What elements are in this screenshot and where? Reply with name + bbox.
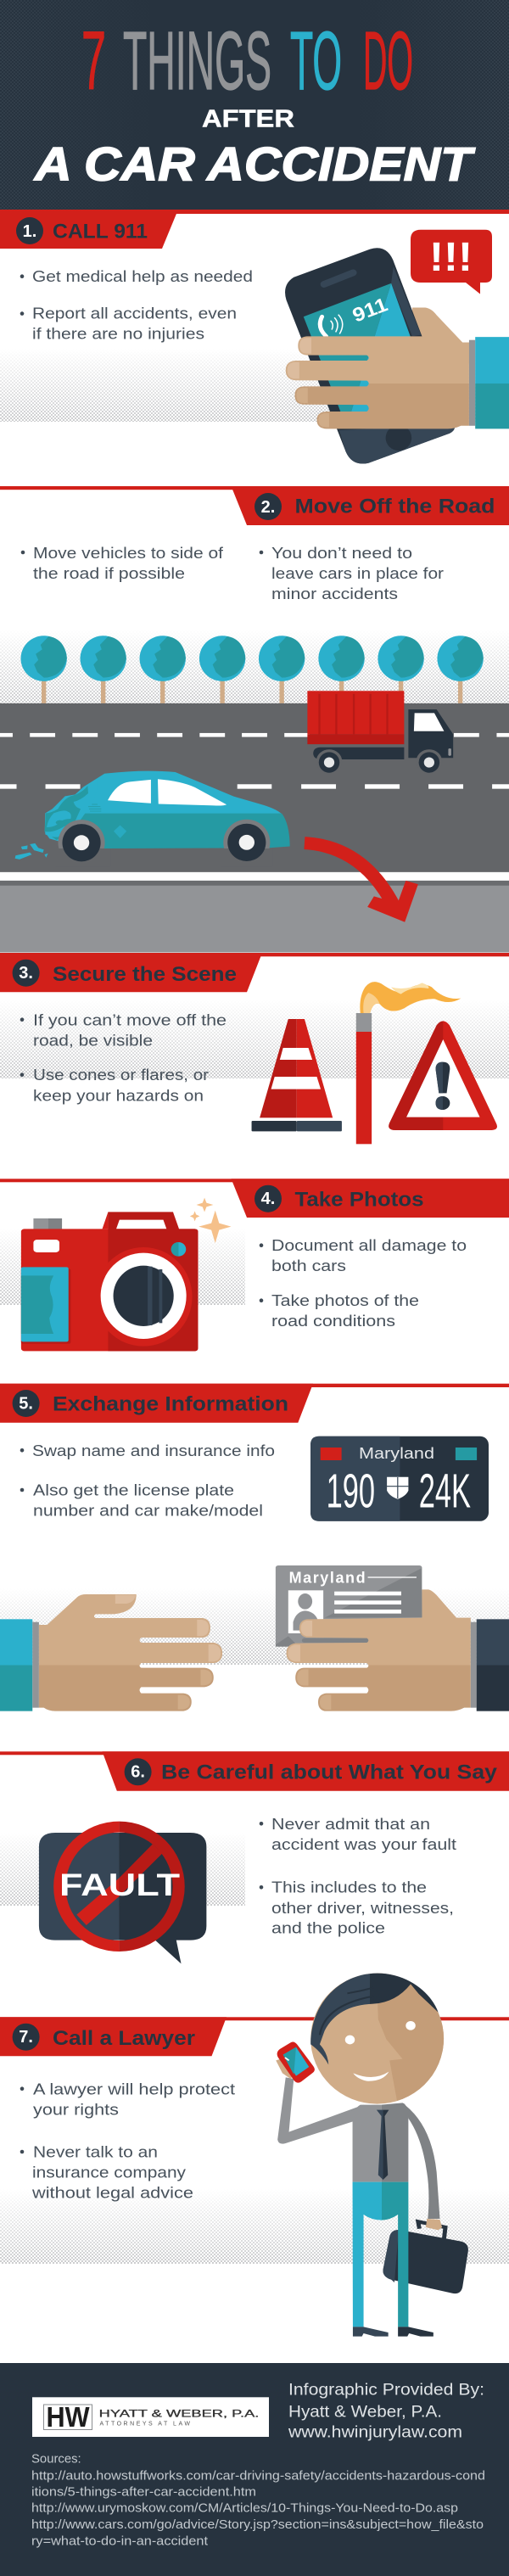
title: 7 things to do: 7 [81,14,106,107]
sources: http://auto.howstuffworks.com/car-driving-safety/accidents-hazardous-cond [31,2468,485,2483]
bullet list 5: Also get the license plate [33,1481,234,1499]
heading banner 7: Call a Lawyer [53,2027,195,2050]
crushed front end [45,779,101,842]
dotted band [0,349,509,422]
sources: Sources: [31,2452,81,2467]
icon: road flare [356,982,461,1144]
heading banner 1: 1. [23,222,36,241]
license plate: Maryland [359,1445,434,1462]
pants and shoes [353,2182,433,2337]
bullet list 2 right: minor accidents [271,585,398,602]
bullet list 6 [260,1815,456,1936]
heading banner 6 [0,1751,509,1791]
icon: no fault speech bubble: FAULT [59,1867,180,1902]
bullet list 7: without legal advice [31,2184,193,2202]
dotted band [0,1000,509,1078]
subtitle: after: AFTER [202,105,294,132]
heading banner 2: 2. [261,498,275,517]
provided by text: Hyatt & Weber, P.A. [288,2402,442,2421]
provided by text: www.hwinjurylaw.com [288,2423,462,2442]
heading banner 1 [0,210,509,249]
bullet list 2 right: leave cars in place for [271,564,444,582]
bullet list 3: Use cones or flares, or [33,1066,209,1084]
dotted band [0,1833,245,1906]
heading banner 1: CALL 911 [53,221,148,243]
bullet list 7: your rights [33,2100,119,2118]
heading banner 4: 4. [261,1190,275,1208]
heading banner 6: 6. [131,1763,145,1782]
logo: Hyatt and Weber [32,2397,269,2437]
bullet list 2 right: You don’t need to [271,544,412,562]
panel: step 4 take photos [0,1179,509,1351]
bullet list 2 left: Move vehicles to side of [33,544,224,562]
icon: camera [21,1198,231,1351]
sources: ry=what-to-do-in-an-accident [31,2534,209,2548]
bullet list 5: number and car make/model [33,1502,263,1520]
trees row [20,636,484,703]
license plate [310,1436,489,1521]
heading banner 5: Exchange Information [53,1393,288,1416]
sources: itions/5-things-after-car-accident.htm [31,2485,256,2500]
icon: traffic cone [252,1019,342,1131]
arrow: off the road [305,843,418,922]
illustration: lawyer on phone with briefcase [276,1971,468,2337]
icon: warning triangle [389,1021,497,1130]
wrecked car [45,771,290,866]
icon: no fault speech bubble [39,1822,206,1963]
icon: right hand holding license card [276,1565,509,1711]
provided by text: Infographic Provided By: [288,2380,484,2399]
panel: footer [0,2363,509,2576]
torso and tie [353,2103,408,2182]
heading banner 4: Take Photos [295,1189,424,1212]
icon: sparkles [190,1198,231,1243]
panel: step 1 call 911 [0,210,509,464]
bullet list 7: insurance company [32,2164,187,2181]
heading banner 3: Secure the Scene [53,963,237,986]
dotted band [0,1588,509,1665]
panel: step 2 move off the road [0,486,509,952]
dotted band [0,2189,509,2264]
heading banner 5: 5. [19,1395,33,1414]
bullet list 7: A lawyer will help protect [33,2080,235,2097]
truck [307,691,453,774]
bullet list 3 [20,1011,227,1104]
heading banner 7 [0,2017,509,2056]
panel: step 7 call a lawyer [0,1971,509,2337]
icon: alert speech bubble: !!! [429,235,473,280]
bullet list 1: Get medical help as needed [32,267,253,285]
provided by text [288,2380,484,2442]
logo: Hyatt and Weber: HW [46,2401,90,2433]
sources: http://www.cars.com/go/advice/Story.jsp?section=ins&subject=how_file&sto [31,2517,484,2532]
bullet list 1 [20,267,253,342]
title: 7 things to do: THINGS [123,14,271,107]
bullet list 4: road conditions [271,1312,395,1330]
bullet list 4: both cars [271,1257,346,1274]
bullet list 7 [20,2080,235,2202]
heading banner 3: 3. [19,964,33,983]
bullet list 6: This includes to the [271,1879,427,1896]
heading banner 6: Be Careful about What You Say [161,1761,498,1784]
license plate: 24K [419,1464,471,1519]
dotted band [0,630,509,704]
panel: step 3 secure the scene [0,953,509,1144]
bullet list 4: Take photos of the [271,1291,419,1309]
heading banner 4 [0,1179,509,1218]
bullet list 6: other driver, witnesses, [271,1899,454,1917]
icon: left hand reaching [0,1594,222,1711]
license plate: 190 [327,1464,375,1519]
text on card: Maryland: Maryland [289,1570,366,1587]
bullet list 4: Document all damage to [271,1236,467,1254]
bullet list 2 left [21,544,224,582]
subtitle: a car accident: A CAR ACCIDENT [33,137,476,190]
head [310,1971,455,2104]
heading banner 3 [0,953,509,992]
bullet list 5 [20,1442,275,1520]
raised arm [277,2077,364,2144]
bullet list 5: Swap name and insurance info [32,1442,275,1459]
panel: step 5 exchange information [0,1384,509,1711]
icon: briefcase [383,2219,468,2293]
heading banner 2: Move Off the Road [295,496,495,518]
header panel [0,0,509,210]
dotted band [0,1229,245,1305]
bullet list 1: Report all accidents, even [32,304,237,322]
heading banner 5 [0,1384,509,1423]
bullet list 2 left: the road if possible [33,564,185,582]
bullet list 4 [260,1236,467,1330]
icon: hand holding phone [285,248,509,464]
heading banner 2 [0,486,509,525]
text on phone: 911: 911 [350,293,390,327]
heading banner 7: 7. [19,2028,33,2047]
bullet list 6: and the police [271,1918,385,1936]
bullet list 6: Never admit that an [271,1815,430,1833]
panel: step 6 be careful about what you say [0,1751,509,1963]
logo: Hyatt and Weber: HYATT & WEBER, P.A. [99,2408,259,2420]
road scene [0,636,509,952]
icon: alert speech bubble [411,230,492,294]
debris [15,843,48,860]
license card [276,1565,422,1647]
bullet list 7: Never talk to an [33,2143,158,2160]
sources [31,2452,485,2548]
right arm [406,2106,439,2219]
sources: http://www.urymoskow.com/CM/Articles/10-Things-You-Need-to-Do.asp [31,2501,458,2516]
logo: Hyatt and Weber: ATTORNEYS AT LAW [100,2421,190,2427]
bullet list 2 right [260,544,444,602]
phone and hand [276,2042,315,2083]
bullet list 1: if there are no injuries [32,324,204,342]
bullet list 6: accident was your fault [271,1835,456,1853]
icons: cone flare and warning triangle [252,982,497,1144]
title: 7 things to do: TO [290,14,342,107]
header panel: DO [363,14,413,107]
bullet list 3: keep your hazards on [33,1086,204,1104]
bullet list 3: If you can’t move off the [33,1011,227,1028]
bullet list 3: road, be visible [33,1031,153,1049]
road [0,703,509,952]
